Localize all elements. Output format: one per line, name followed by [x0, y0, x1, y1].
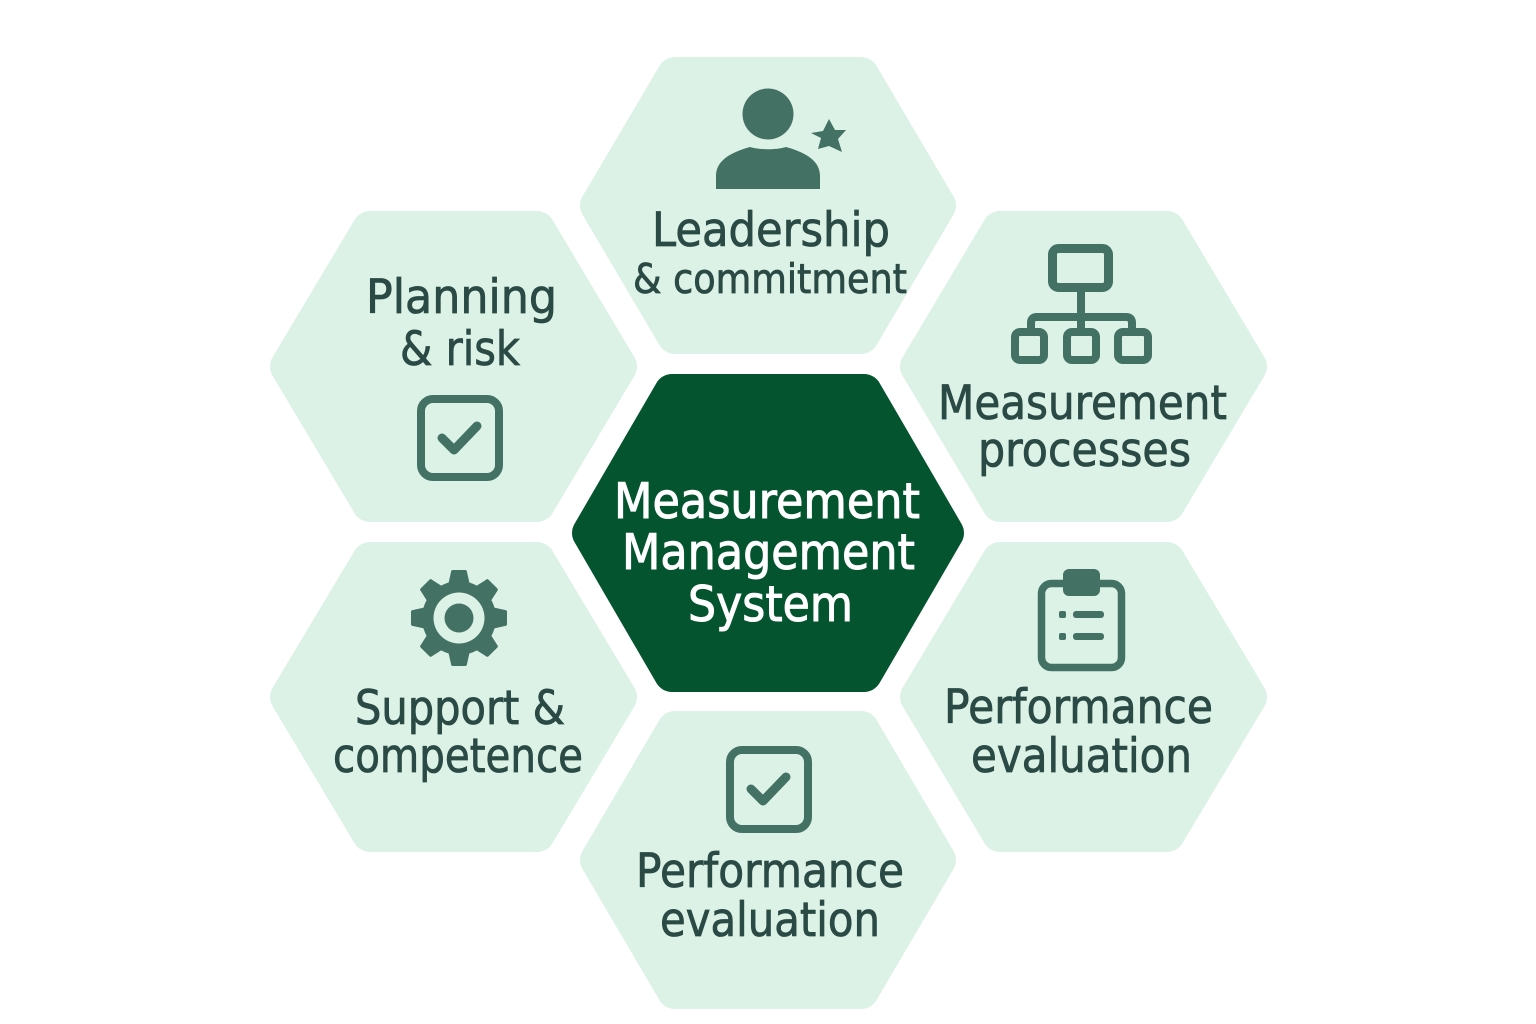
hexagon background: performance evaluation bottom — [598, 729, 938, 991]
label: performance evaluation bottom: Performance — [636, 844, 904, 899]
panel: leadership and commitment — [598, 75, 938, 336]
hexagon background: performance evaluation right — [918, 560, 1249, 834]
label: measurement processes — [938, 376, 1227, 478]
label: performance evaluation right: evaluation — [971, 729, 1192, 784]
icon: person with star — [716, 88, 846, 189]
title: measurement management system — [614, 473, 920, 633]
label: measurement processes: processes — [978, 423, 1191, 478]
label: planning and risk: & risk — [400, 322, 521, 377]
title: measurement management system: Measurement — [614, 473, 920, 530]
hexagon background: planning — [288, 229, 619, 504]
label: support and competence — [333, 681, 583, 784]
label: support and competence: competence — [333, 729, 583, 784]
icon: organisation chart — [1015, 248, 1148, 360]
panel: measurement processes — [918, 229, 1249, 504]
hexagon background: central hub — [590, 392, 946, 674]
icon: gear — [411, 570, 507, 666]
hexagon background: leadership — [598, 75, 938, 336]
hexagon background: support — [288, 560, 619, 834]
title: measurement management system: System — [688, 576, 853, 633]
hexagon background: measurement processes — [918, 229, 1249, 504]
panel: performance evaluation right — [918, 560, 1249, 834]
label: performance evaluation right: Performance — [944, 680, 1213, 735]
label: leadership and commitment: & commitment — [633, 255, 907, 303]
label: planning and risk: Planning — [366, 270, 557, 325]
label: measurement processes: Measurement — [938, 376, 1227, 431]
panel: support and competence — [288, 560, 619, 834]
label: performance evaluation bottom: evaluation — [660, 893, 880, 948]
panel: central hub — [590, 392, 946, 674]
label: performance evaluation right — [944, 680, 1213, 784]
label: planning and risk — [366, 270, 557, 377]
icon: clipboard — [1042, 569, 1122, 668]
panel: performance evaluation bottom — [598, 729, 938, 991]
label: leadership and commitment: Leadership — [652, 203, 890, 258]
icon: checkbox — [730, 750, 808, 829]
panel: planning and risk — [288, 229, 619, 504]
label: support and competence: Support & — [355, 681, 565, 736]
title: measurement management system: Management — [622, 524, 915, 581]
icon: checkbox — [421, 399, 499, 477]
label: leadership and commitment — [633, 203, 907, 303]
label: performance evaluation bottom — [636, 844, 904, 948]
